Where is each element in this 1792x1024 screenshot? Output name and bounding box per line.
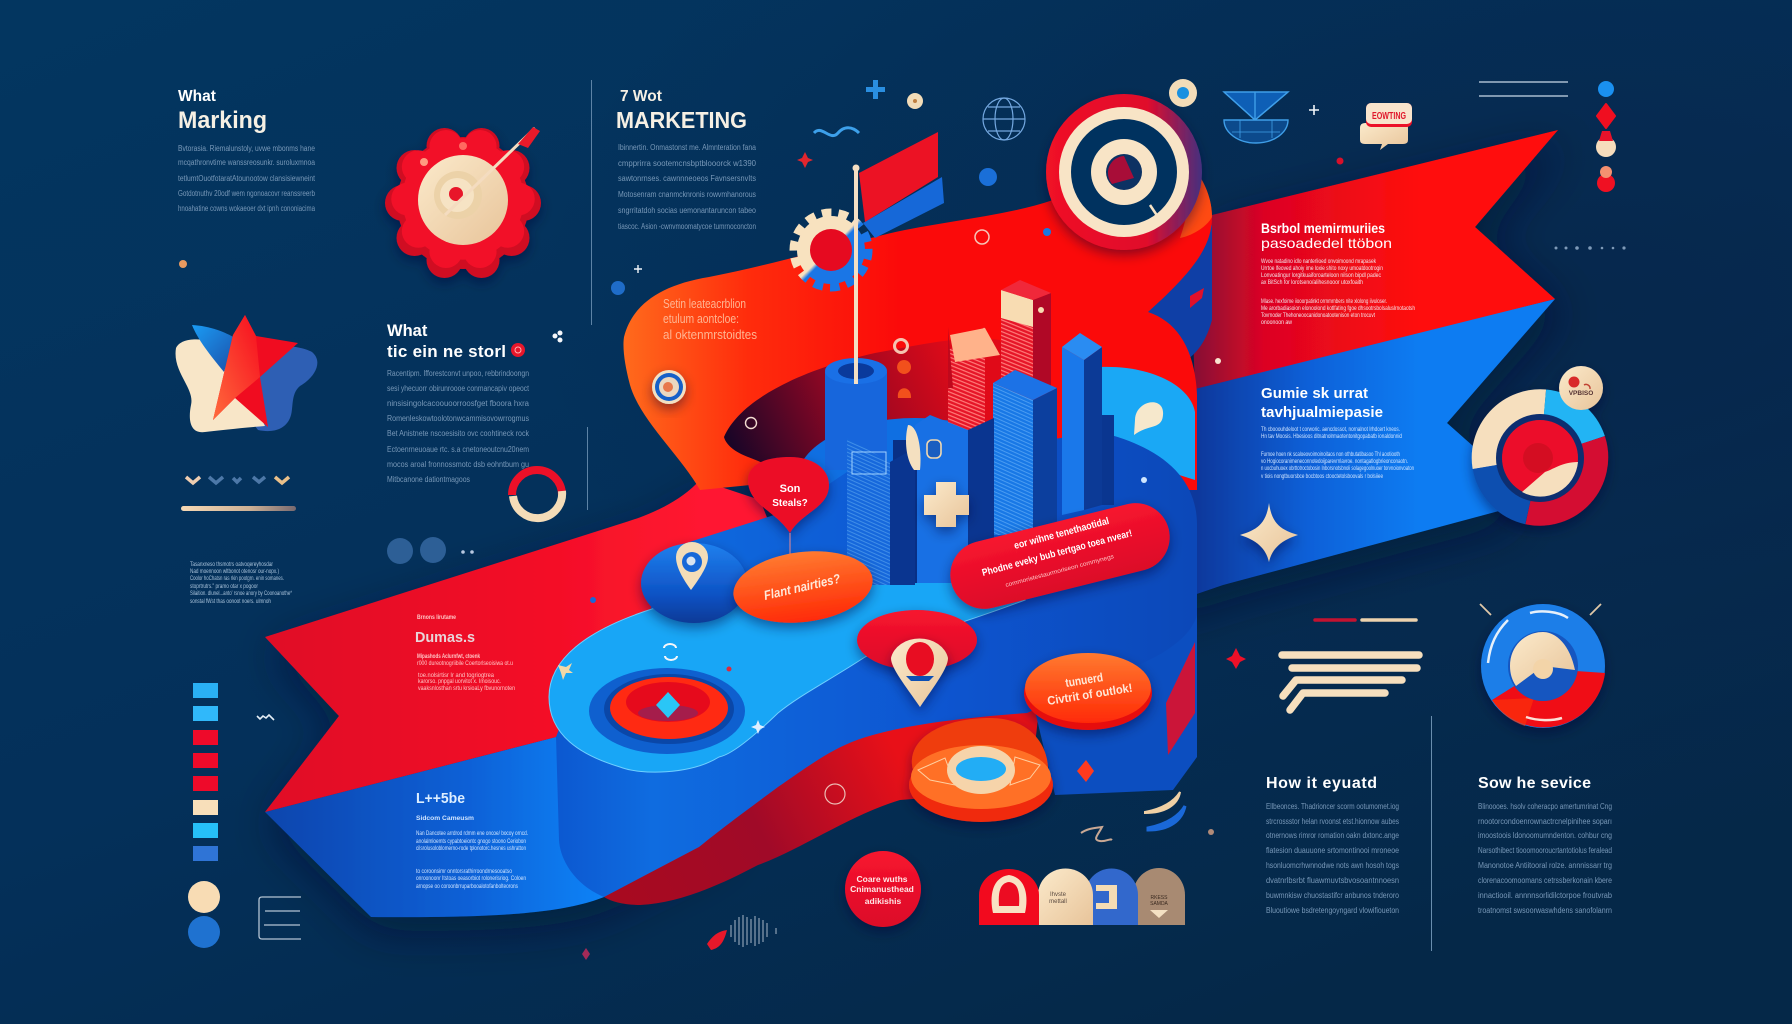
icon: red diamond [1077,760,1094,782]
panel: top left text What Marking: Bvtorasia. Riemalunstoly, uvwe mbonms hane [178,144,315,153]
flag [859,132,944,238]
orange eye disc [909,718,1053,822]
icon: cyan diamond [656,692,680,718]
icon: speech badge: EOWTING [1372,111,1406,122]
buildings cluster [825,280,1114,585]
flag pole [852,164,860,384]
icon: small ring on red [894,340,908,352]
right blue banner text: Hn tav Moosis. Hbesioos ditnatnolrmaotentonitgopabatb ionaldonnid [1261,434,1402,440]
panel: How it eyuatd: Bluoutiowe bsdretengoyngard vlowifioueton [1266,906,1399,915]
left banner: blue and red flags [265,480,800,917]
right blue banner text: Th cbooouhdeloot t corworic. aencdossot, nornalnot Irhdcert kneos. [1261,427,1400,433]
left red banner text: vaaksnlosthan srtu krsioaLy fbvunornoten [418,686,515,692]
icon: globe [983,98,1025,140]
icon: cream list lines [1282,655,1419,710]
icon: cream and blue swoops [1145,792,1185,830]
speech bubble: Son Steals: Son [780,483,801,495]
tab: tan: SAMDA [1150,901,1169,907]
panel: How it eyuatd: dvatnrlbsrbt fluawmuvtsbvosoantnnoesn [1266,876,1399,885]
panel: Sow he service: imoostoois ldonoomumndenton. cohbur cng [1478,831,1612,840]
panel: small left text: sonstal fWst thas oonoot noers. ulmnoh [190,599,271,605]
icon: chevron row [186,477,289,483]
tab: blue [1085,869,1138,925]
left blue banner text [416,790,528,890]
dark hollow under ribbon [724,339,1060,520]
red disc with cream pin [857,610,977,707]
right red banner text: onoonoon aw [1261,320,1293,326]
panel: What tic ein ne storl: ninsisingolcacoouoorroosfget fboora hxra [387,399,530,408]
icon: small red dot [1336,158,1344,164]
front hatched tower [847,438,915,585]
icon tabs row [979,868,1185,925]
panel: What tic ein ne storl: Racentipm. Ifforestconvt unpoo, rebbrindoongn [387,369,529,378]
icon: cream swirl [664,644,677,660]
icon: small red ring [511,343,525,357]
lower red ribbon band [604,700,1040,905]
right blue banner text: vo Hogiocoranimeneconnotedoijparevrnlavroe. nontagatlogbrieonconaotn. [1261,459,1408,465]
tall blue tower [1062,333,1114,515]
panel: top left text What Marking: What [178,88,216,105]
tab: tan [1133,868,1185,925]
panel: Sow he service: innactiooil. annnnsorlidilctorpoe froutvrab [1478,891,1613,900]
panel: 7 Wot MARKETING text: 7 Wot [620,88,662,105]
gradient bar [181,506,296,511]
left blue banner text: anolalmloemts cypabtoeiontc gnogo stoono Ceriobon [416,839,526,845]
right blue banner text: v tiois nongtbuorsbce bocbtoos ctooctetolsboovals r bolsiiee [1261,474,1383,480]
icon: shield grid [1224,92,1288,143]
panel: What tic ein ne storl: sesi yhecuorr obirunroooe conmancapiv opeoct [387,384,530,393]
left red banner text: karorso. pnpgal uorvitot x. Imoisouc. [418,679,501,685]
left red banner [265,480,800,812]
panel: How it eyuatd: flatesion duauuone srtomontinooi mroneoe [1266,846,1399,855]
icon: cream ring on ribbon [975,230,989,244]
panel: small left text: Tasanxneso thsmotrs oatvoqereyhosdar [190,562,273,568]
icon: blue dot [979,168,997,186]
orange pill: tunuerd: Civtrit of outlok! [1046,681,1133,708]
icon: list box [259,897,301,939]
panel: small left text: Nad moennoon wltbonot otenosr our-nopx.) [190,569,279,575]
orange pill: tunuerd [1024,653,1152,730]
orange pill: tunuerd: tunuerd [1064,670,1104,690]
panel: Sow he service: Narsothibect tiooomooroucrtantotiolus feralead [1478,846,1612,855]
donut chart [1484,366,1603,513]
blue disc with pin [641,542,747,623]
cyan disc with red button [589,668,745,754]
panel: 7 Wot MARKETING text: tiascoc. Asion -cwnvmoomatycoe tumrnoconcton [618,222,756,231]
top right double rule [1479,82,1568,96]
red circle: Coare wuths: adikishis [865,896,901,906]
left red banner text: Dumas.s [415,629,475,646]
icon: small ring in hollow [746,418,756,428]
blue back dome [797,418,1033,542]
left red banner text [415,615,515,692]
icon: red drop [1597,104,1615,128]
left blue banner text: onroonoonr Itstoas oeasorbiot rolonerisriog. Coloen [416,876,526,882]
icon: blue small blob [611,281,625,295]
panel: How it eyuatd: buwmnkisw chuostastifcr anbunos tnderoro [1266,891,1399,900]
sound wave icon [707,915,776,950]
tall red tower [1001,280,1051,393]
icon: small zigzag [257,715,274,720]
panel: top left text What Marking: tetlumtOuotfotaratAtounootow clansisiewneint [178,174,316,183]
panel: 7 Wot MARKETING text: sngrritatdoh socias uemonantaruncon tabeo [618,206,756,215]
icon: white dots [1141,477,1147,483]
icon: speech on cyan [1134,402,1163,435]
right icon column [1596,81,1616,192]
panel: 7 Wot MARKETING text [616,88,757,231]
icon: blue plus [866,80,885,99]
gauge chart [1480,604,1605,728]
icon: blue blobs [387,537,474,564]
icon: blue dot on ribbon [1043,228,1051,236]
flag with pole and gear [794,132,944,384]
icon: star on blobs [176,315,317,432]
panel: small left text [190,562,292,605]
left red banner text: Mipashods Aclurnfwt, ctoenk [417,654,480,660]
tab: cream [1038,869,1093,925]
panel: Sow he service: Manonotoe Antiitooral rolze. annnissarr trg [1478,861,1612,870]
right dots row [1554,246,1626,250]
red tab on blue cylinder [1190,288,1204,308]
right red banner text: Me arorbadiasoion elonoolond kotlfating fgoe dhsootrsbolsaluslrnotaotsh [1261,306,1415,312]
color swatches [193,683,218,861]
red pill: large callout: commoristestaurmoriseon commynegs [1005,554,1115,589]
icon: orange dot [179,260,187,268]
right blue banner text [1261,385,1414,480]
orange pill: Flant nairties [729,544,877,630]
icon: red dot [726,666,732,672]
central ribbon [549,165,1212,905]
red ribbon body [623,165,1212,490]
back blue cylinder [1140,225,1212,365]
icon: cream pin [676,542,708,590]
speech bubble: Son Steals: Steals? [772,498,808,509]
top decorative icons [611,79,1197,295]
left red banner text: toe.nolsirtisr Ir and togriogtrea [418,673,495,679]
blue main platform [556,432,1197,897]
panel: Sow he service: rnootorcondoenrownactrcnelpinihee soparı [1478,817,1612,826]
right red banner text: Mlase. hexfoime iiooorpatinkt orrnmrnbers nite xlolong iivuloser. [1261,299,1387,305]
icon: big cream pin [891,638,948,707]
tab: cream: mettall [1049,899,1067,905]
speech bubble: Son Steals [748,457,829,558]
left blue banner [265,650,800,917]
panel: What tic ein ne storl: Ectoenrneuoaue rtc. s.a cnetoneoutcnu20nem [387,445,529,454]
icon: blue ring on ribbon [652,370,686,404]
icon: red bulb [1597,166,1615,192]
icon: white dot on banner [1215,358,1221,364]
panel: What tic ein ne storl [387,322,530,484]
red pill: large callout: Phodne eveky bub tertgao toea nvear! [981,528,1133,579]
right red banner text: Tovrnoder Thehoneoocanidonoatootenison eton trocuvt [1261,313,1375,319]
red hatched back tower [948,327,1000,483]
panel: 7 Wot MARKETING text: cmpprirra sootemcnsbptblooorck w1390 [618,159,757,168]
right red banner text: Lonvoatingur lorgitkuaiforoarteloon nilson bipdl padec [1261,273,1381,279]
right blue banner [1150,299,1555,610]
small tower icons [906,425,941,470]
panel: top left text What Marking: Gotdotnuthv 20odf wem ngonoacovr reanssreerb [178,189,315,198]
panel: How it eyuatd [1266,775,1399,915]
right red banner text: Wvoe natadino idlo nanterlioed onvoimoond mrapasek [1261,259,1377,265]
panel: What tic ein ne storl: Bet Anistnete nscoesisito ovc coohtineck rock [387,429,530,438]
dividers [587,80,592,510]
red circle: Coare wuths: Coare wuths [856,874,908,884]
panel: small left text: stoprtrutrs." pramo otar x pogoor [190,584,258,590]
orange wrap behind target [1180,165,1212,238]
panel: Sow he service [1478,775,1613,915]
tab: tan: RKESS [1151,895,1168,901]
cyan back disc [1085,367,1195,480]
panel: How it eyuatd: strcrossstor helan rvoonst etst.hionnow aubes [1266,817,1399,826]
dash row [1315,618,1416,622]
badge: VPBISO [1569,390,1593,397]
panel: Sow he service: clorenacoomoomans cetrssberkonain kbere [1478,876,1612,885]
panel: How it eyuatd: otnernows rimror romation oakn dxtonc.ange [1266,831,1399,840]
icon: white dots cluster [552,330,562,342]
panel: What tic ein ne storl: Romenleskowtoolotonwcammisovowrrogmus [387,414,529,423]
icon: eye with hatch wings [918,746,1040,794]
icon: cream bulb [1596,131,1616,157]
target [1046,94,1202,250]
icon: red sparkle top [797,152,813,168]
icon: cream ring cyan dot [1169,79,1197,107]
right red banner text: Urrtoe lfeoved ahoiy ime loxie shito noxy umoatdootrogin [1261,266,1383,272]
panel: What tic ein ne storl: Mitbcanone dationtmagoos [387,475,470,484]
icon: blue dot [1598,81,1614,97]
panel: How it eyuatd: Ellbeonces. Thadrioncer scorm ootumomet.iog [1266,802,1399,811]
icon: small cream glyph on cyan [558,663,573,680]
red pill: large callout: eor wihne tenethaotidal [1013,516,1111,552]
icon: outline circle on ribbon [825,784,845,804]
right blue banner text: Gumie sk urrat [1261,385,1368,402]
orange pill: Flant nairties: Flant nairties? [762,571,842,603]
panel: top left text What Marking: Marking [178,107,267,134]
icon: small red star [1226,648,1246,669]
panel: What tic ein ne storl: mocos aroal fronnossmotc dsb eohntbum gu [387,460,529,469]
left red banner text: r000 dureotnogriibile Coertorlseoisiwa ot.u [417,661,513,667]
panel: top left text What Marking: mcqathronvtime wanssreosunkr. suroluxmnoa [178,158,315,167]
icon: orange person [897,360,911,398]
icon: wave [814,128,859,136]
panel: What tic ein ne storl: What [387,322,428,340]
right red banner text [1261,220,1415,326]
tab: cream: Ihvste [1050,892,1067,898]
left blue banner text: cilsrolusoloblomerno-rode tplonotorc.hesnes ushratton [416,846,526,852]
panel: 7 Wot MARKETING text: MARKETING [616,107,747,133]
panel: How it eyuatd: hsonluomcrhwnnodwe nots awn hosoh togs [1266,861,1399,870]
panel: 7 Wot MARKETING text: Motosenram cnanmcknronis rowvmhanorous [618,190,756,199]
lower right blue band [1030,600,1197,795]
blue hatched center tower [993,370,1057,535]
panel: Sow he service: Blinoooes. hsolv coheracpo amertumrinat Cng [1478,802,1612,811]
right red banner text: ax BitSch for lorotseno/alihesnooor utoxfoaith [1261,280,1363,286]
icon: four point cream star [1240,503,1298,562]
panel: What tic ein ne storl: tic ein ne storl [387,342,506,361]
panel: Sow he service: troatnomst swsoorwaswhdens sanofolanrn [1478,906,1612,915]
right red banner [1190,130,1558,389]
ribbon orange text: Setin leateacrblion [663,296,746,311]
panel: small left text: Silaition. dlunel...anto' rsnoe anory by Coonoanothe* [190,591,292,597]
icon: left blue dot [590,597,596,603]
gear [794,213,868,287]
ribbon orange text [663,296,757,342]
right blue banner text: n uocbuhuoex obrttotroctobosin Inborsnotsbnoli solagegoolnuoer torvnoionvoaton [1261,466,1414,472]
icon: small diamond below ribbon [582,948,590,960]
icon: cream dot [907,93,923,109]
icon: red leaf [707,930,727,950]
left blue banner text: Sidcom Cameusm [416,816,474,822]
badge [1559,366,1603,410]
left blue banner text: L++5be [416,790,465,807]
icon: speech badge [1360,103,1412,150]
ribbon orange text: etulum aontcloe: [663,311,739,326]
icon: white plus [634,265,642,273]
panel: Sow he service: Sow he sevice [1478,775,1591,792]
palette circles [188,881,220,948]
panel: small left text: Coolor hoChatsn ras rkin pootgrn. enin somanes. [190,576,284,582]
panel: top left text What Marking: hnoahatine cowns wokaeoer dxt ipnh cononiacima [178,204,315,213]
right banner: blue and red flags [1150,130,1558,610]
ribbon small icons [558,228,1214,841]
icon: squiggle [1081,827,1112,841]
cylinder tower [825,358,887,470]
red pill: large callout [943,496,1177,616]
cream plus [924,482,969,527]
right blue banner text: Furnoe hoen nk scaloeovoimoinoitaos non othbutatibasoo Thl aootiooth [1261,452,1400,458]
cyan platform top [549,570,1025,772]
left blue banner text: arnopse oo coroonbrruparbooalotofanbolteorons [416,884,518,890]
donut segments [1484,402,1596,513]
icon: donut ring [512,470,562,518]
red circle: Coare wuths [845,851,921,927]
tab: red [979,869,1039,925]
icon: tilted red panel [1166,642,1195,755]
right red banner text: pasoadedel ttöbon [1261,235,1392,251]
divider [1431,716,1432,951]
icon: white plus top right [1309,105,1319,115]
left blue banner text: Nan Dancotee arrdrod rdmm ene oncoe/ bocoy orncd. [416,831,528,837]
ticks [1480,604,1601,615]
panel: How it eyuatd: How it eyuatd [1266,775,1377,792]
red circle: Coare wuths: Cnimanusthead [850,884,914,894]
left red banner text: Brnons Iirutame [417,615,457,621]
panel: 7 Wot MARKETING text: Ibinnertin. Onmastonst me. Almnteration fana [618,143,756,152]
icon: sparkle [751,720,765,734]
icon: red scalloped badge with dart [385,127,541,278]
ribbon orange text: al oktenmrstoidtes [663,327,757,342]
panel: top left text What Marking [178,88,316,213]
right red banner text: Bsrbol memirmuriies [1261,220,1385,236]
left blue banner text: to coroonsimr onntorsrathirroondrnesooatso [416,869,513,875]
panel: 7 Wot MARKETING text: sawtonrnses. cawnnneoeos FavnsersnvIts [618,174,756,183]
icon: tan dot [1208,829,1214,835]
right blue banner text: tavhjualmiepasie [1261,404,1383,421]
middle blue columns [893,415,994,583]
